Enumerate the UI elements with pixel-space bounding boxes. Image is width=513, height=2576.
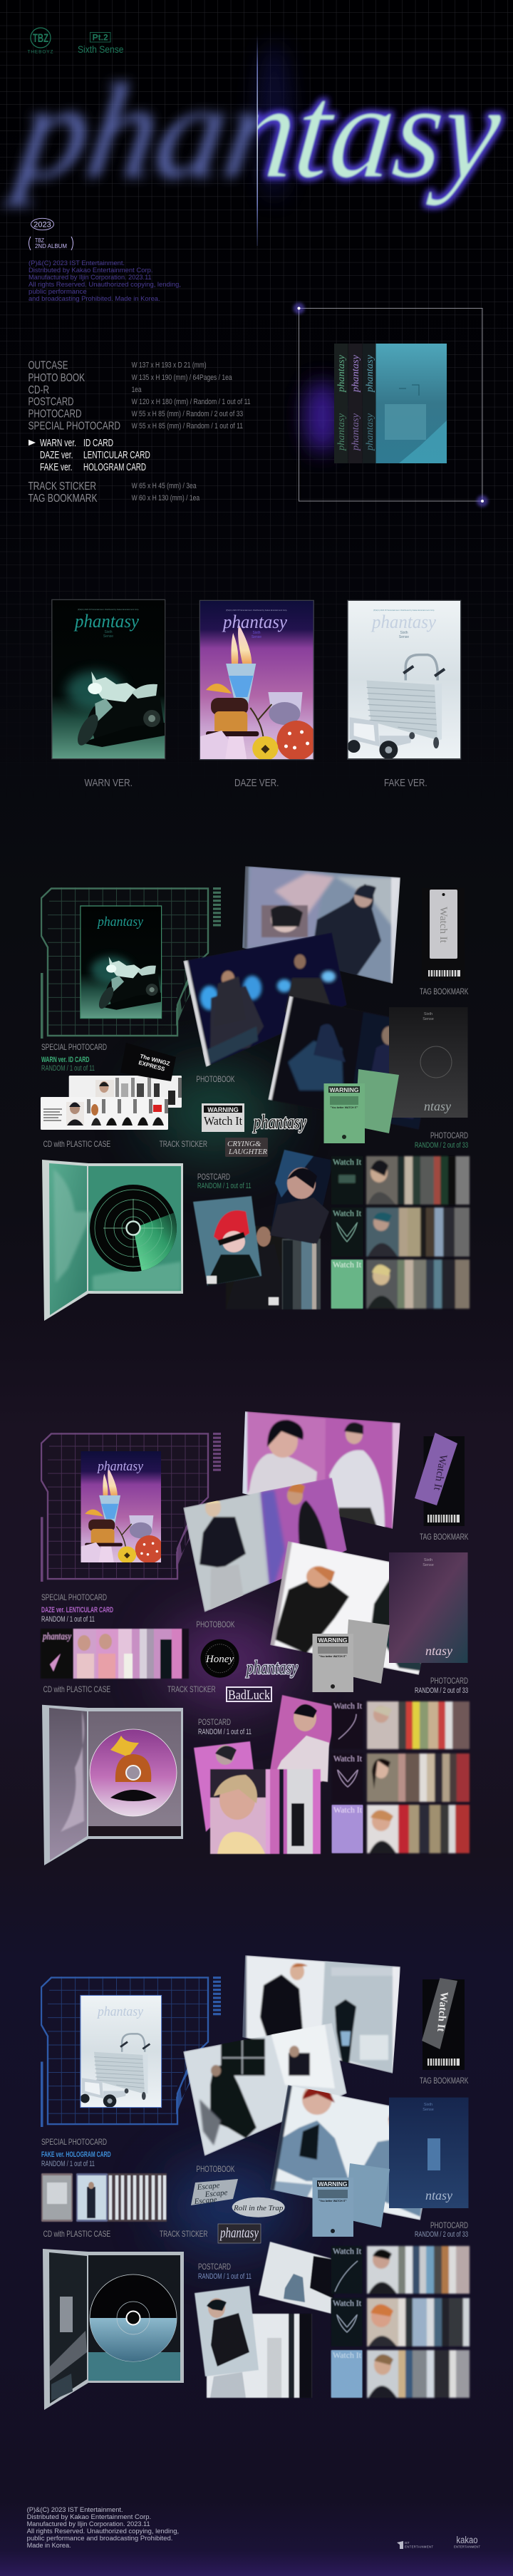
badge: Pt.2 Sixth Sense: Sixth Sense [78, 43, 124, 55]
photocard backs: Watch It [333, 1701, 363, 1711]
album: DAZE: Sixth [252, 631, 261, 635]
photocard envelopes [312, 2163, 390, 2237]
sticker: Watch It: Watch It [204, 1114, 242, 1128]
sticker: Crying and Laughter [225, 1138, 268, 1157]
album: WARN: (P)&(C) 2023 IST Entertainment. Distributed by Kakao Entertainment Corp. [78, 608, 139, 611]
photocard back [389, 1007, 467, 1118]
photocard fronts [367, 2246, 470, 2398]
black Wingz Express card: EXPRESS [138, 1059, 166, 1073]
sticker: phantasy: phantasy [245, 1657, 298, 1678]
special photocard versions: HOLOGRAM CARD [83, 462, 146, 473]
labels: DAZE version: PHOTOCARD [430, 1676, 468, 1686]
lenticular cards strip: phantasy [42, 1632, 72, 1642]
photocard back: Sense [423, 1563, 434, 1567]
photocard back [389, 2098, 469, 2208]
album version labels: WARN VER. [84, 778, 133, 789]
photocard fronts [366, 1156, 470, 1309]
special photocard versions: LENTICULAR CARD [83, 450, 150, 461]
photocard envelopes [323, 1069, 399, 1143]
photocard grid [331, 1156, 470, 1309]
copyright block: public performance [28, 288, 87, 295]
sticker: Escape: Escape [204, 2188, 228, 2199]
photobook C [268, 996, 421, 1129]
title: phantasy [1, 36, 508, 246]
photocard back: Sense [423, 2108, 434, 2112]
labels: WARN version: PHOTOCARD [430, 1130, 468, 1140]
tag bookmark [422, 1978, 465, 2070]
spec rows: components: POSTCARD [28, 396, 74, 408]
special photocard versions: ID CARD [83, 438, 113, 449]
footer copyright: public performance and broadcasting Prohibited. [27, 2535, 172, 2542]
photocard back: ntasy [425, 2188, 452, 2203]
photocard backs: Watch It [333, 2350, 362, 2360]
spec rows: components: TAG BOOKMARK [28, 493, 98, 505]
spec rows: components: TRACK STICKER [28, 480, 96, 493]
tag bookmark [422, 888, 465, 981]
sticker: Roll in the Trap [232, 2198, 285, 2217]
CD disc horizon [90, 2274, 177, 2361]
album version labels: FAKE VER. [384, 778, 428, 789]
labels: DAZE version: POSTCARD [198, 1717, 231, 1727]
labels: WARN version: CD with PLASTIC CASE [43, 1139, 110, 1149]
hologram cards [41, 2173, 167, 2222]
special photocard versions: FAKE ver. [40, 462, 73, 473]
album label: 2ND ALBUM [35, 243, 67, 249]
panel: outcase frame [294, 302, 488, 507]
spec list [28, 359, 251, 505]
labels: WARN version: RANDOM / 1 out of 11 [197, 1182, 252, 1190]
spec rows: dimensions: W 137 x H 193 x D 21 (mm) [132, 361, 207, 370]
header logos [27, 28, 124, 55]
photocard backs: Watch It [333, 1157, 362, 1167]
outcase spines: phantasy [351, 354, 361, 393]
album label: TBZ [35, 237, 44, 244]
footer copyright: Distributed by Kakao Entertainment Corp. [27, 2513, 151, 2521]
album label [28, 237, 73, 250]
photobook A [242, 1411, 400, 1530]
tag bookmark: Watch It [431, 1453, 449, 1492]
postcards [195, 2242, 335, 2398]
copyright block: Distributed by Kakao Entertainment Corp. [28, 267, 152, 274]
spec rows: dimensions: W 65 x H 45 (mm) / 3ea [132, 482, 197, 490]
album version labels: DAZE VER. [234, 778, 279, 789]
labels: DAZE version: RANDOM / 2 out of 33 [415, 1686, 468, 1695]
labels: WARN version: TAG BOOKMARK [420, 986, 469, 996]
CD disc dessert [90, 1729, 177, 1816]
photocard back: Sixth [424, 2103, 432, 2107]
photocard backs: Watch It [333, 1805, 363, 1815]
labels: FAKE version: TAG BOOKMARK [420, 2076, 469, 2086]
HUD frame and album [41, 1977, 221, 2127]
year badge: 2023 [33, 221, 51, 230]
photocard envelopes [312, 1619, 390, 1692]
logo: IST Entertainment: IST [405, 2541, 410, 2545]
glowing vertical line [256, 36, 258, 246]
HUD frame and album: phantasy [96, 1459, 144, 1474]
black Wingz Express card: The WINGZ [139, 1053, 171, 1067]
album: WARN [52, 600, 165, 758]
spec rows: dimensions: W 135 x H 190 (mm) / 64Pages / 1ea [132, 373, 232, 382]
logo: IST Entertainment [397, 2541, 433, 2549]
special photocard versions [28, 438, 150, 473]
labels: FAKE version: RANDOM / 2 out of 33 [415, 2230, 468, 2239]
photobook C [270, 2085, 423, 2220]
tag bookmark: Watch It [435, 1992, 450, 2032]
HUD frame and album [41, 1433, 221, 1582]
labels: FAKE version: RANDOM / 1 out of 11 [41, 2160, 95, 2168]
photocard backs: Watch It [333, 1753, 363, 1763]
album: WARN: Sense [103, 634, 113, 639]
special photocard versions: DAZE ver. [40, 450, 73, 461]
icon: sparkle top [294, 302, 305, 314]
labels: WARN version: WARN ver. ID CARD [41, 1056, 90, 1064]
labels: DAZE version: TRACK STICKER [167, 1684, 216, 1694]
panel: FAKE version contents [41, 1955, 470, 2410]
labels: FAKE version: SPECIAL PHOTOCARD [41, 2137, 107, 2147]
photocard fronts [367, 1701, 470, 1853]
spec rows: components: OUTCASE [28, 359, 68, 371]
labels: WARN version: PHOTOBOOK [197, 1074, 235, 1084]
outcase spines: phantasy [336, 413, 347, 451]
album version labels [84, 778, 428, 789]
lenticular cards strip [41, 1629, 189, 1679]
labels: FAKE version: TRACK STICKER [160, 2229, 208, 2239]
postcards [193, 1150, 333, 1309]
photocard envelopes: "You better WATCH IT" [318, 2200, 347, 2203]
logo: kakao Entertainment [454, 2535, 480, 2549]
labels: WARN version: RANDOM / 2 out of 33 [415, 1141, 468, 1150]
sticker: phantasy [218, 2224, 261, 2243]
photocard backs: Watch It [333, 2298, 362, 2308]
album: DAZE: Sense [252, 635, 261, 639]
photobook B [183, 932, 347, 1067]
photocard grid [332, 1701, 470, 1853]
photobook C [270, 1541, 422, 1675]
copyright block: Manufactured by Iljin Corporation. 2023.11 [28, 274, 152, 281]
footer copyright: (P)&(C) 2023 IST Entertainment. [27, 2506, 123, 2514]
photocard back: ntasy [425, 1644, 452, 1658]
labels: DAZE version: RANDOM / 1 out of 11 [41, 1615, 95, 1624]
special photocard versions: WARN ver. [40, 438, 76, 449]
labels: WARN version [41, 986, 469, 1190]
album: DAZE: (P)&(C) 2023 IST Entertainment. Distributed by Kakao Entertainment Corp. [226, 609, 287, 612]
labels: WARN version: TRACK STICKER [160, 1139, 207, 1149]
sticker: Crying and Laughter: LAUGHTER [228, 1148, 267, 1156]
photocard back: Sixth [424, 1558, 432, 1562]
photocard envelopes: WARNING [318, 1637, 348, 1644]
photobook B [183, 1478, 347, 1612]
labels: FAKE version: CD with PLASTIC CASE [43, 2229, 110, 2239]
photobook A [242, 866, 400, 984]
photocard envelopes: WARNING [318, 2180, 348, 2188]
postcards [194, 1695, 337, 1854]
labels: FAKE version: FAKE ver. HOLOGRAM CARD [41, 2150, 111, 2159]
spec rows: dimensions: W 60 x H 130 (mm) / 1ea [132, 494, 200, 503]
spec rows: components: SPECIAL PHOTOCARD [28, 421, 120, 433]
icon: sparkle bottom [477, 495, 488, 507]
labels: WARN version: RANDOM / 1 out of 11 [41, 1064, 95, 1073]
photocard backs [331, 2246, 363, 2398]
badge: Pt.2 Sixth Sense [78, 33, 124, 55]
CD disc radar [90, 1185, 180, 1276]
footer copyright: Made in Korea. [27, 2542, 71, 2550]
labels: DAZE version: RANDOM / 1 out of 11 [198, 1728, 252, 1736]
photocard envelopes: "You better WATCH IT" [330, 1106, 358, 1109]
photocard back [389, 1552, 467, 1663]
outcase spines [334, 344, 375, 463]
album: WARN: Sixth [104, 630, 113, 634]
sticker: Crying and Laughter: CRYING& [227, 1140, 261, 1148]
album: FAKE: Sixth [400, 631, 408, 635]
album: DAZE [200, 600, 317, 761]
labels: FAKE version: PHOTOBOOK [197, 2164, 235, 2174]
spec rows: dimensions [132, 361, 251, 503]
spec rows: components: PHOTO BOOK [28, 372, 85, 384]
labels: DAZE version: SPECIAL PHOTOCARD [41, 1592, 107, 1602]
icon: TBZ logo: TBZ [33, 31, 48, 45]
sticker: Watch It [202, 1103, 244, 1132]
album: FAKE: Sense [399, 635, 409, 639]
spec rows: dimensions: 1ea [132, 386, 142, 394]
photocard envelopes: "You better WATCH IT" [318, 1655, 347, 1658]
labels: WARN version: SPECIAL PHOTOCARD [41, 1042, 107, 1052]
photobook A [242, 1955, 400, 2073]
sticker: Honey: Honey [205, 1654, 234, 1665]
photocard backs [332, 1701, 363, 1853]
sticker: Roll in the Trap: Roll in the Trap [233, 2204, 284, 2212]
sticker: Escape [191, 2179, 238, 2206]
logo: IST Entertainment: ENTERTAINMENT [405, 2545, 433, 2549]
badge: Pt.2 Sixth Sense: Pt.2 [93, 34, 108, 43]
black Wingz Express card [120, 1043, 176, 1081]
footer copyright [27, 2506, 179, 2550]
CD with plastic case [42, 1160, 183, 1321]
labels: WARN version: POSTCARD [197, 1172, 230, 1182]
sticker: Bad Luck: BadLuck [228, 1688, 270, 1703]
panel: WARN version contents [41, 866, 470, 1321]
labels: FAKE version: POSTCARD [198, 2262, 231, 2272]
background grid [0, 0, 513, 684]
panel: album covers [52, 600, 460, 789]
sticker: Escape: Escape [193, 2195, 217, 2206]
labels: DAZE version: CD with PLASTIC CASE [43, 1684, 110, 1694]
CD with plastic case [43, 2249, 184, 2410]
photocard backs [331, 1156, 363, 1309]
photocard backs: Watch It [333, 1259, 362, 1269]
labels: DAZE version: PHOTOBOOK [197, 1619, 235, 1629]
sticker: phantasy: phantasy [252, 1111, 306, 1133]
photocard grid [331, 2246, 470, 2398]
photocard backs: Watch It [333, 1208, 362, 1218]
logo: kakao Entertainment: kakao [456, 2535, 477, 2545]
outcase spines: phantasy [336, 354, 347, 393]
copyright block: All rights Reserved. Unauthorized copying, lending, [28, 281, 181, 288]
spec rows: components: CD-R [28, 384, 49, 396]
album: WARN: phantasy [73, 611, 139, 632]
CD with plastic case [42, 1705, 183, 1865]
icon: TBZ logo [27, 28, 53, 54]
photocard back: Sixth [424, 1012, 432, 1016]
labels: DAZE version: DAZE ver. LENTICULAR CARD [41, 1606, 113, 1614]
tag bookmark [415, 1433, 465, 1526]
spec rows: dimensions: W 55 x H 85 (mm) / Random / 2 out of 33 [132, 410, 243, 418]
logo: kakao Entertainment: ENTERTAINMENT [454, 2545, 480, 2549]
album: FAKE: phantasy [370, 612, 436, 632]
labels: FAKE version: PHOTOCARD [430, 2220, 468, 2230]
ID cards [41, 1076, 182, 1130]
sticker: phantasy: phantasy [219, 2225, 259, 2241]
spec rows: dimensions: W 120 x H 180 (mm) / Random / 1 out of 11 [132, 398, 251, 406]
spec rows: dimensions: W 55 x H 85 (mm) / Random / 1 out of 11 [132, 422, 243, 431]
photocard backs: Watch It [333, 2246, 362, 2256]
copyright block [28, 259, 181, 302]
title blurred half: phan [1, 57, 306, 207]
footer copyright: All rights Reserved. Unauthorized copying, lending, [27, 2528, 179, 2535]
sticker: Honey [201, 1639, 239, 1678]
HUD frame and album: phantasy [96, 915, 144, 929]
sticker: Watch It: WARNING [207, 1106, 239, 1113]
year badge [31, 218, 54, 230]
HUD frame and album: phantasy [96, 2004, 144, 2019]
HUD frame and album [41, 887, 221, 1039]
icon: TBZ logo: THEBOYZ [27, 50, 53, 54]
outcase spines: phantasy [365, 354, 375, 393]
labels: FAKE version [41, 2076, 469, 2281]
labels: DAZE version [41, 1532, 469, 1736]
labels: DAZE version: TAG BOOKMARK [420, 1532, 469, 1542]
footer copyright: Manufactured by Iljin Corporation. 2023.11 [27, 2520, 150, 2528]
sticker: Escape: Escape [196, 2181, 220, 2192]
photobook B [183, 2023, 347, 2156]
spec rows: components [28, 359, 120, 505]
labels: FAKE version: RANDOM / 1 out of 11 [198, 2272, 252, 2281]
copyright block: and broadcasting Prohibited. Made in Korea. [28, 295, 160, 302]
album: FAKE [348, 600, 460, 759]
outcase spines: phantasy [365, 413, 375, 451]
album: DAZE: phantasy [222, 612, 287, 632]
outcase cover [376, 344, 447, 463]
photocard back: ntasy [424, 1099, 451, 1113]
copyright block: (P)&(C) 2023 IST Entertainment. [28, 259, 125, 267]
tag bookmark: Watch It [437, 907, 449, 944]
photocard envelopes: WARNING [329, 1086, 359, 1093]
panel: DAZE version contents [41, 1411, 470, 1865]
album: FAKE: (P)&(C) 2023 IST Entertainment. Distributed by Kakao Entertainment Corp. [373, 609, 435, 612]
spec rows: components: PHOTOCARD [28, 408, 81, 421]
photocard back: Sense [423, 1017, 434, 1021]
outcase spines: phantasy [351, 413, 361, 451]
